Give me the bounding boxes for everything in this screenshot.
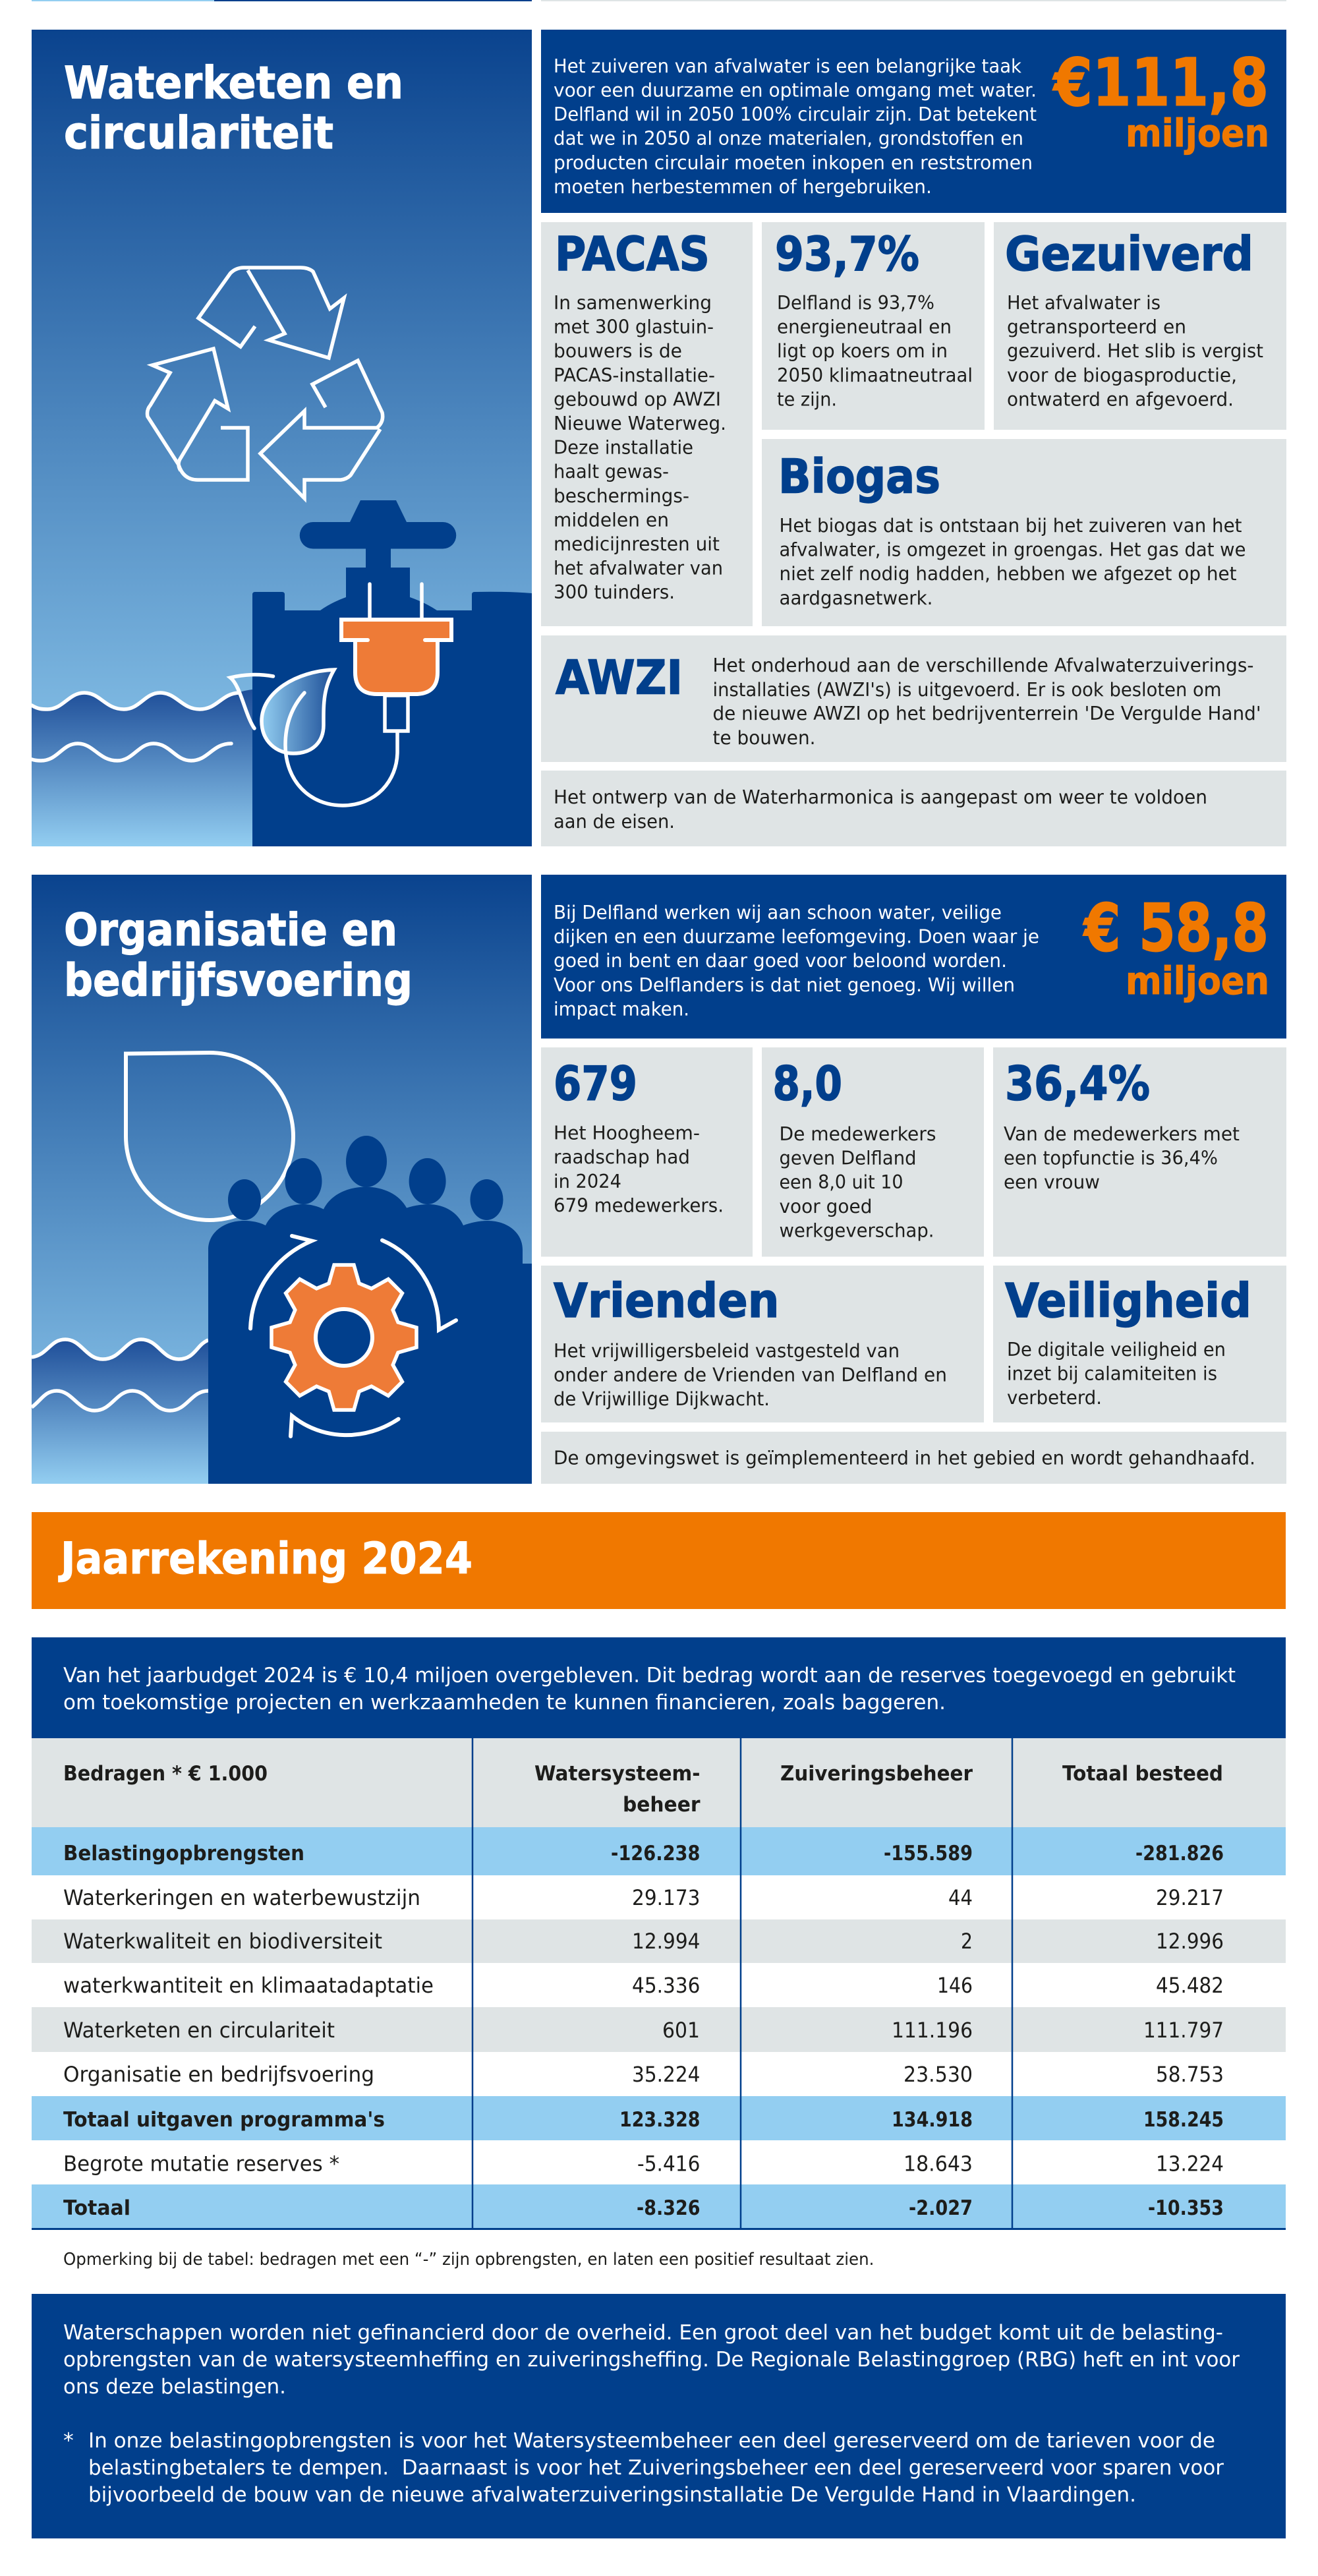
panel: organisatie intro [541, 875, 1286, 1039]
text block: Vrienden: de Vrijwillige Dijkwacht. [554, 1388, 770, 1410]
text block: voetnoot [63, 2429, 1224, 2507]
text block: Vrienden [554, 1340, 947, 1410]
amount: 111,8 miljoen: miljoen [1126, 111, 1269, 156]
row: Totaal uitgaven: Totaal uitgaven programma's [63, 2108, 385, 2132]
row: Totaal: Totaal [63, 2196, 130, 2220]
row: Begrote mutatie: -5.416 [637, 2152, 700, 2177]
table header [63, 1762, 1223, 1817]
text block: PACAS: haalt gewas- [554, 461, 669, 483]
text block: werkgeverschap [779, 1123, 936, 1241]
table: jaarrekening [32, 1738, 1286, 2230]
icon: plug [341, 584, 451, 731]
text block: Waterharmonica: Het ontwerp van de Waterharmonica is aangepast om weer te voldoen [554, 786, 1207, 808]
text block: AWZI: installaties (AWZI's) is uitgevoerd. Er is ook besloten om [713, 679, 1222, 701]
text block: energieneutraal: Delfland is 93,7% [777, 292, 934, 314]
text block: PACAS: PACAS-installatie- [554, 365, 715, 386]
row: Begrote mutatie: 13.224 [1156, 2152, 1224, 2177]
title: Waterketen en circulariteit [64, 57, 403, 160]
text block: Gezuiverd: getransporteerd en [1007, 316, 1186, 338]
text block: PACAS: Nieuwe Waterweg. [554, 413, 726, 434]
panel: Waterharmonica [541, 771, 1286, 846]
panel: 36,4% [993, 1047, 1286, 1256]
text block: financiering: ons deze belastingen. [63, 2375, 286, 2399]
illustration: group of people [208, 1136, 532, 1484]
icon: rotation arrows around gear [250, 1236, 456, 1436]
title: Organisatie en bedrijfsvoering: bedrijfsvoering [64, 954, 413, 1007]
text block: werkgeverschap: geven Delfland [779, 1148, 916, 1169]
text block: organisatie intro: impact maken. [554, 998, 689, 1020]
row: Waterketen: 111.196 [892, 2018, 973, 2043]
row: waterkwantiteit [63, 1973, 1224, 1998]
row: Belastingopbrengsten: -281.826 [1135, 1842, 1224, 1865]
text block: organisatie intro: Voor ons Delflanders is dat niet genoeg. Wij willen [554, 974, 1015, 996]
row: Begrote mutatie [63, 2152, 1224, 2177]
panel: belastingen toelichting [32, 2294, 1286, 2538]
text block: Gezuiverd: Het afvalwater is [1007, 292, 1160, 314]
text block: AWZI: Het onderhoud aan de verschillende Afvalwaterzuiverings- [713, 655, 1253, 676]
text block: financiering: opbrengsten van de watersysteemheffing en zuiveringsheffing. De Regionale Belastinggroep (RBG) heft en int voor [63, 2348, 1240, 2372]
amount: 111,8 miljoen [1052, 45, 1269, 156]
text block: medewerkers: 679 medewerkers. [554, 1194, 724, 1216]
icon: leaf [262, 670, 397, 805]
amount: 58,8 miljoen [1083, 891, 1269, 1003]
row: Waterkeringen [63, 1885, 1224, 1910]
text block: jaarbudget: Van het jaarbudget 2024 is € 10,4 miljoen overgebleven. Dit bedrag wordt aan de reserves toegevoegd en gebruikt [63, 1664, 1236, 1687]
table header: beheer [623, 1793, 701, 1817]
illustration: water valve [252, 500, 532, 846]
panel: waterketen illustration [32, 30, 532, 846]
text block: waterketen intro: moeten herbestemmen of hergebruiken. [554, 176, 932, 198]
text block: werkgeverschap: voor goed [779, 1196, 873, 1217]
text block: energieneutraal: te zijn. [777, 388, 837, 410]
text block: Gezuiverd [1007, 292, 1263, 410]
row: Waterketen: 111.797 [1143, 2018, 1224, 2043]
text block: Veiligheid [1007, 1339, 1226, 1409]
heading: Gezuiverd: Gezuiverd [1005, 227, 1253, 281]
heading: Veiligheid: Veiligheid [1005, 1273, 1251, 1328]
row: Waterketen [63, 2018, 1224, 2043]
row: Totaal: -10.353 [1148, 2196, 1224, 2220]
amount: 58,8 miljoen: € 58,8 [1083, 891, 1269, 966]
text block: Biogas: Het biogas dat is ontstaan bij het zuiveren van het [779, 515, 1242, 537]
panel: Veiligheid [993, 1266, 1286, 1422]
row: Totaal: -8.326 [637, 2196, 700, 2220]
row: Totaal uitgaven: 123.328 [619, 2108, 700, 2132]
panel: Gezuiverd [994, 222, 1286, 430]
row: Begrote mutatie: Begrote mutatie reserves * [63, 2152, 339, 2177]
row: Waterkwaliteit: Waterkwaliteit en biodiversiteit [63, 1929, 382, 1954]
heading: AWZI: AWZI [556, 651, 683, 705]
heading: 8,0: 8,0 [772, 1057, 842, 1111]
text block: werkgeverschap: een 8,0 uit 10 [779, 1171, 903, 1193]
text block: PACAS: Deze installatie [554, 437, 693, 459]
panel: 8,0 [762, 1047, 984, 1256]
table note: Opmerking bij de tabel: bedragen met een “-” zijn opbrengsten, en laten een positief resultaat zien. [63, 2250, 874, 2269]
row: Organisatie: 58.753 [1156, 2062, 1224, 2087]
row: Belastingopbrengsten [63, 1842, 1224, 1865]
text block: medewerkers [554, 1123, 724, 1216]
text block: voetnoot: bijvoorbeeld de bouw van de nieuwe afvalwaterzuiveringsinstallatie De Vergulde Hand in Vlaardingen. [88, 2483, 1136, 2507]
heading: 679: 679 [554, 1057, 637, 1111]
text block: PACAS: gebouwd op AWZI [554, 388, 721, 410]
text block: Biogas: aardgasnetwerk. [779, 587, 933, 609]
text block: financiering [63, 2321, 1240, 2399]
row: Organisatie: Organisatie en bedrijfsvoering [63, 2062, 374, 2087]
heading: PACAS: PACAS [555, 227, 710, 281]
text block: PACAS: 300 tuinders. [554, 581, 675, 603]
text block: energieneutraal: 2050 klimaatneutraal [777, 365, 973, 386]
row: Totaal uitgaven [63, 2108, 1224, 2132]
row: Begrote mutatie: 18.643 [903, 2152, 973, 2177]
text block: werkgeverschap: De medewerkers [779, 1123, 936, 1145]
text block: voetnoot: In onze belastingopbrengsten is voor het Watersysteembeheer een deel gereserveerd om de tarieven voor de [88, 2429, 1215, 2453]
panel: omgevingswet [541, 1432, 1286, 1484]
panel: Vrienden [541, 1266, 984, 1422]
text block: Waterharmonica: aan de eisen. [554, 811, 675, 833]
water waves [32, 1339, 208, 1484]
title: Organisatie en bedrijfsvoering: Organisatie en [64, 904, 397, 956]
text block: medewerkers: Het Hoogheem- [554, 1123, 700, 1144]
row: Waterkwaliteit: 12.994 [632, 1929, 700, 1954]
text block: Gezuiverd: ontwaterd en afgevoerd. [1007, 388, 1234, 410]
text: omgevingswet: De omgevingswet is geïmplementeerd in het gebied en wordt gehandhaafd. [554, 1448, 1255, 1469]
text block: Veiligheid: De digitale veiligheid en [1007, 1339, 1226, 1361]
text block: PACAS: beschermings- [554, 485, 689, 507]
text block: jaarbudget: om toekomstige projecten en werkzaamheden te kunnen financieren, zoals baggeren. [63, 1691, 946, 1714]
icon: water drop outline [126, 1053, 293, 1220]
text block: energieneutraal [777, 292, 973, 410]
text block: Gezuiverd: voor de biogasproductie, [1007, 365, 1237, 386]
row: Waterkwaliteit: 12.996 [1156, 1929, 1224, 1954]
heading: 36,4%: 36,4% [1005, 1057, 1150, 1111]
text block: organisatie intro: dijken en een duurzame leefomgeving. Doen waar je [554, 926, 1039, 948]
row: Belastingopbrengsten: -126.238 [611, 1842, 700, 1865]
water waves [32, 689, 252, 846]
panel: AWZI [541, 635, 1286, 762]
panel: 679 [541, 1047, 753, 1256]
amount: 111,8 miljoen: €111,8 [1052, 45, 1269, 121]
row: Totaal [63, 2196, 1224, 2220]
text block: werkgeverschap: werkgeverschap. [779, 1219, 934, 1241]
row: Waterketen: Waterketen en circulariteit [63, 2018, 335, 2043]
row: Organisatie: 23.530 [903, 2062, 973, 2087]
table header: Watersysteem- [534, 1762, 700, 1786]
row: Totaal: -2.027 [909, 2196, 973, 2220]
text block: Biogas: niet zelf nodig hadden, hebben we afgezet op het [779, 563, 1236, 585]
text block: organisatie intro: Bij Delfland werken wij aan schoon water, veilige [554, 902, 1002, 923]
row: Waterketen: 601 [662, 2018, 700, 2043]
panel: PACAS [541, 222, 753, 626]
text block: PACAS: middelen en [554, 509, 669, 531]
text block: PACAS: medicijnresten uit [554, 533, 720, 555]
text block: Biogas [779, 515, 1246, 609]
text block: Waterharmonica [554, 786, 1207, 833]
heading: Biogas: Biogas [778, 450, 940, 504]
row: Waterkeringen: 29.217 [1156, 1885, 1224, 1910]
table header: Totaal besteed [1062, 1762, 1223, 1786]
heading: 93,7%: 93,7% [775, 227, 919, 281]
panel: 93,7% [762, 222, 985, 430]
row: Waterkeringen: 44 [948, 1885, 973, 1910]
text block: AWZI [713, 655, 1261, 749]
text block: PACAS: bouwers is de [554, 340, 682, 362]
text block: PACAS: In samenwerking [554, 292, 712, 314]
text block: Veiligheid: verbeterd. [1007, 1387, 1102, 1409]
amount: 58,8 miljoen: miljoen [1126, 958, 1269, 1003]
text block: organisatie intro: goed in bent en daar goed voor beloond worden. [554, 950, 1007, 972]
text block: waterketen intro: Delfland wil in 2050 100% circulair zijn. Dat betekent [554, 103, 1037, 125]
heading: Jaarrekening 2024: Jaarrekening 2024 [58, 1533, 473, 1584]
text block: jaarbudget [63, 1664, 1236, 1714]
row: waterkwantiteit: waterkwantiteit en klimaatadaptatie [63, 1973, 434, 1998]
text block: waterketen intro: Het zuiveren van afvalwater is een belangrijke taak [554, 55, 1021, 77]
text block: financiering: Waterschappen worden niet gefinancierd door de overheid. Een groot deel van het budget komt uit de belasting- [63, 2321, 1223, 2345]
row: waterkwantiteit: 45.482 [1156, 1973, 1224, 1998]
icon: recycling arrows [148, 268, 383, 498]
table header: Zuiveringsbeheer [780, 1762, 973, 1786]
text block: waterketen intro: voor een duurzame en optimale omgang met water. [554, 79, 1037, 102]
panel: jaarbudget intro [32, 1637, 1286, 1738]
panel: waterketen intro [541, 30, 1286, 213]
row: Organisatie: 35.224 [632, 2062, 700, 2087]
text block: energieneutraal: energieneutraal en [777, 316, 952, 338]
text block: topfunctie: een vrouw [1004, 1171, 1100, 1193]
text block: PACAS: met 300 glastuin- [554, 316, 714, 338]
table header: Bedragen * € 1.000 [63, 1762, 268, 1786]
text block: medewerkers: raadschap had [554, 1146, 690, 1168]
text block: topfunctie: een topfunctie is 36,4% [1004, 1148, 1218, 1169]
text block: PACAS [554, 292, 726, 603]
text block: AWZI: te bouwen. [713, 727, 816, 749]
text block: energieneutraal: ligt op koers om in [777, 340, 948, 362]
text block: waterketen intro: producten circulair moeten inkopen en reststromen [554, 152, 1033, 173]
row: Totaal uitgaven: 158.245 [1143, 2108, 1224, 2132]
text block: medewerkers: in 2024 [554, 1171, 621, 1192]
heading: Vrienden: Vrienden [554, 1273, 779, 1328]
text block: voetnoot: * [63, 2429, 74, 2453]
row: Waterkeringen: Waterkeringen en waterbewustzijn [63, 1885, 420, 1910]
row: Organisatie [63, 2062, 1224, 2087]
text block: Vrienden: Het vrijwilligersbeleid vastgesteld van [554, 1340, 900, 1362]
text block: PACAS: het afvalwater van [554, 558, 723, 579]
row: Totaal uitgaven: 134.918 [892, 2108, 973, 2132]
text block: organisatie intro [554, 902, 1039, 1020]
panel: organisatie illustration [32, 875, 532, 1484]
text block: topfunctie [1004, 1123, 1240, 1193]
text block: waterketen intro: dat we in 2050 al onze materialen, grondstoffen en [554, 128, 1023, 150]
row: Waterkwaliteit: 2 [961, 1929, 973, 1954]
text block: topfunctie: Van de medewerkers met [1004, 1123, 1240, 1145]
row: Waterkwaliteit [63, 1929, 1224, 1954]
text block: Biogas: afvalwater, is omgezet in groengas. Het gas dat we [779, 539, 1246, 560]
panel: Biogas [762, 439, 1286, 626]
text block: Vrienden: onder andere de Vrienden van Delfland en [554, 1364, 947, 1386]
text block: Veiligheid: inzet bij calamiteiten is [1007, 1363, 1217, 1385]
text block: Gezuiverd: gezuiverd. Het slib is vergist [1007, 340, 1263, 362]
row: Belastingopbrengsten: Belastingopbrengsten [63, 1842, 304, 1865]
row: Waterkeringen: 29.173 [632, 1885, 700, 1910]
text block: AWZI: de nieuwe AWZI op het bedrijventerrein 'De Vergulde Hand' [713, 703, 1261, 724]
title: Organisatie en bedrijfsvoering [64, 904, 413, 1007]
row: waterkwantiteit: 45.336 [632, 1973, 700, 1998]
row: Belastingopbrengsten: -155.589 [884, 1842, 973, 1865]
text block: waterketen intro [554, 55, 1037, 198]
icon: gear [272, 1265, 416, 1410]
row: waterkwantiteit: 146 [937, 1973, 973, 1998]
title: Waterketen en circulariteit: circulariteit [64, 107, 333, 160]
banner: Jaarrekening 2024 [32, 1512, 1286, 1609]
icon: small leaf outline [231, 675, 273, 728]
text block: voetnoot: belastingbetalers te dempen. Daarnaast is voor het Zuiveringsbeheer een deel gereserveerd voor sparen voor [88, 2456, 1224, 2480]
title: Waterketen en circulariteit: Waterketen en [64, 57, 403, 109]
